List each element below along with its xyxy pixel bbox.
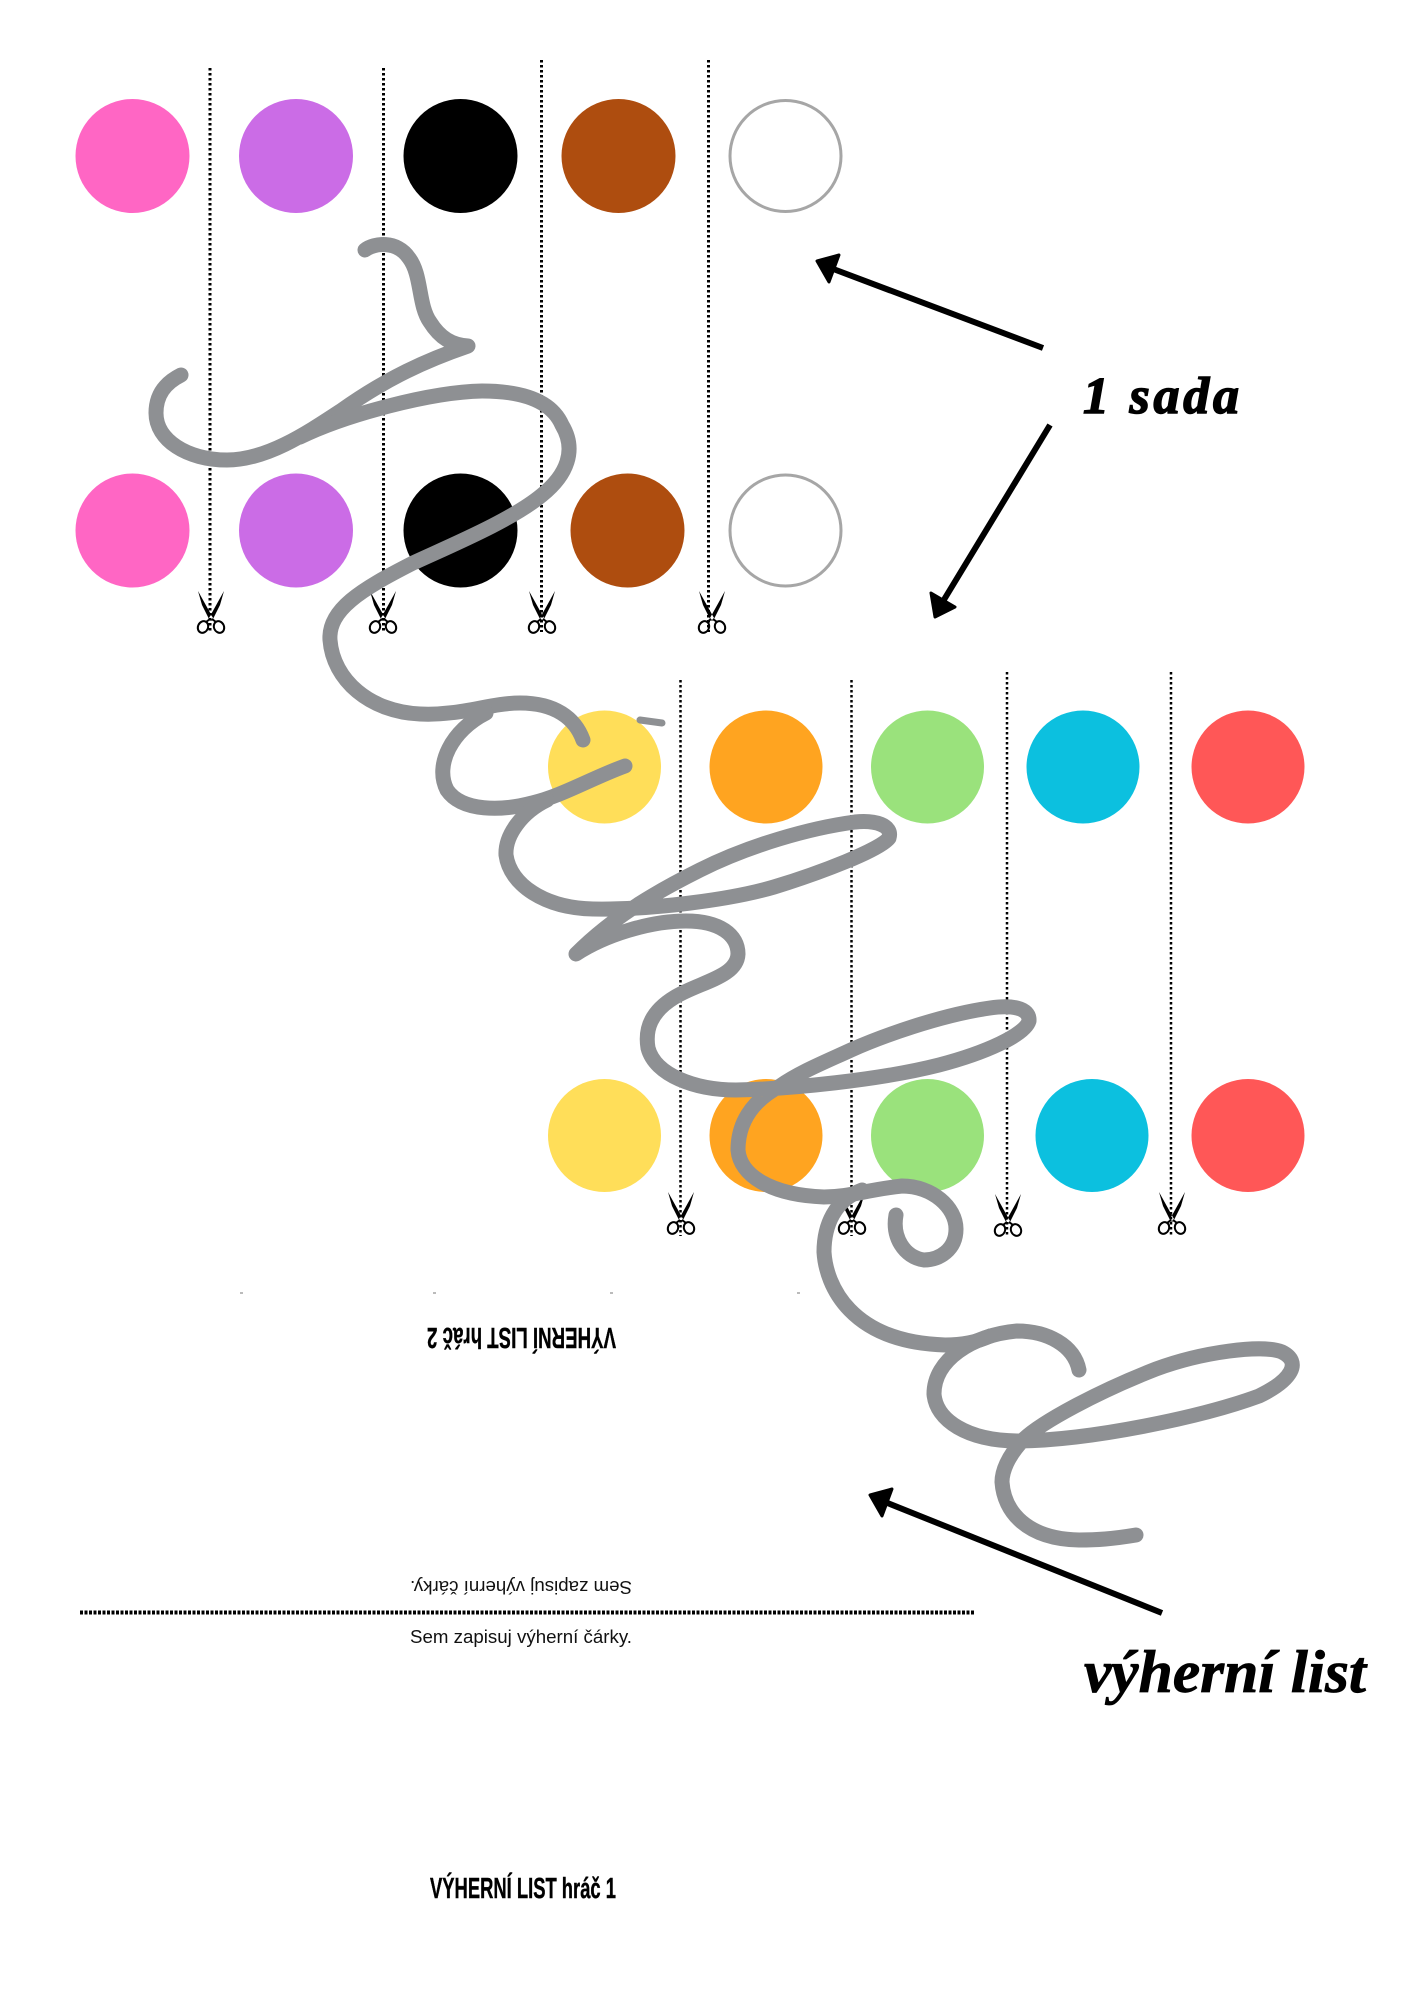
- grey script flourish overlay: [156, 245, 1292, 1540]
- set 2: top row of circles: [548, 710, 1304, 824]
- set 2: scissors icons: [666, 1192, 1187, 1238]
- dotted fold line: [80, 1610, 975, 1614]
- set 2: bottom row of circles: [548, 1079, 1304, 1192]
- label: výherní list: výherní list: [1084, 1639, 1368, 1705]
- small cut tick marks: [240, 1292, 800, 1294]
- win sheet player 1 title: VÝHERNÍ LIST hráč 1: [430, 1871, 616, 1905]
- arrow: výherní list: [870, 1489, 1162, 1613]
- tally note, upside down: Sem zapisuj výherní čárky.: [410, 1577, 632, 1597]
- win sheet player 2 title, upside down: VÝHERNÍ LIST hráč 2: [427, 1321, 616, 1355]
- set 1: scissors icons: [196, 591, 727, 635]
- tally note: Sem zapisuj výherní čárky.: [410, 1627, 632, 1647]
- set 1: bottom row of circles: [76, 474, 841, 588]
- label: 1 sada: 1 sada: [1083, 368, 1239, 425]
- arrow: 1 sada to bottom set: [931, 425, 1050, 617]
- arrow: 1 sada to top set: [817, 255, 1043, 348]
- set 1: top row of circles: [76, 99, 841, 213]
- set 1: dotted cut lines: [210, 60, 708, 632]
- set 2: dotted cut lines: [680, 672, 1171, 1236]
